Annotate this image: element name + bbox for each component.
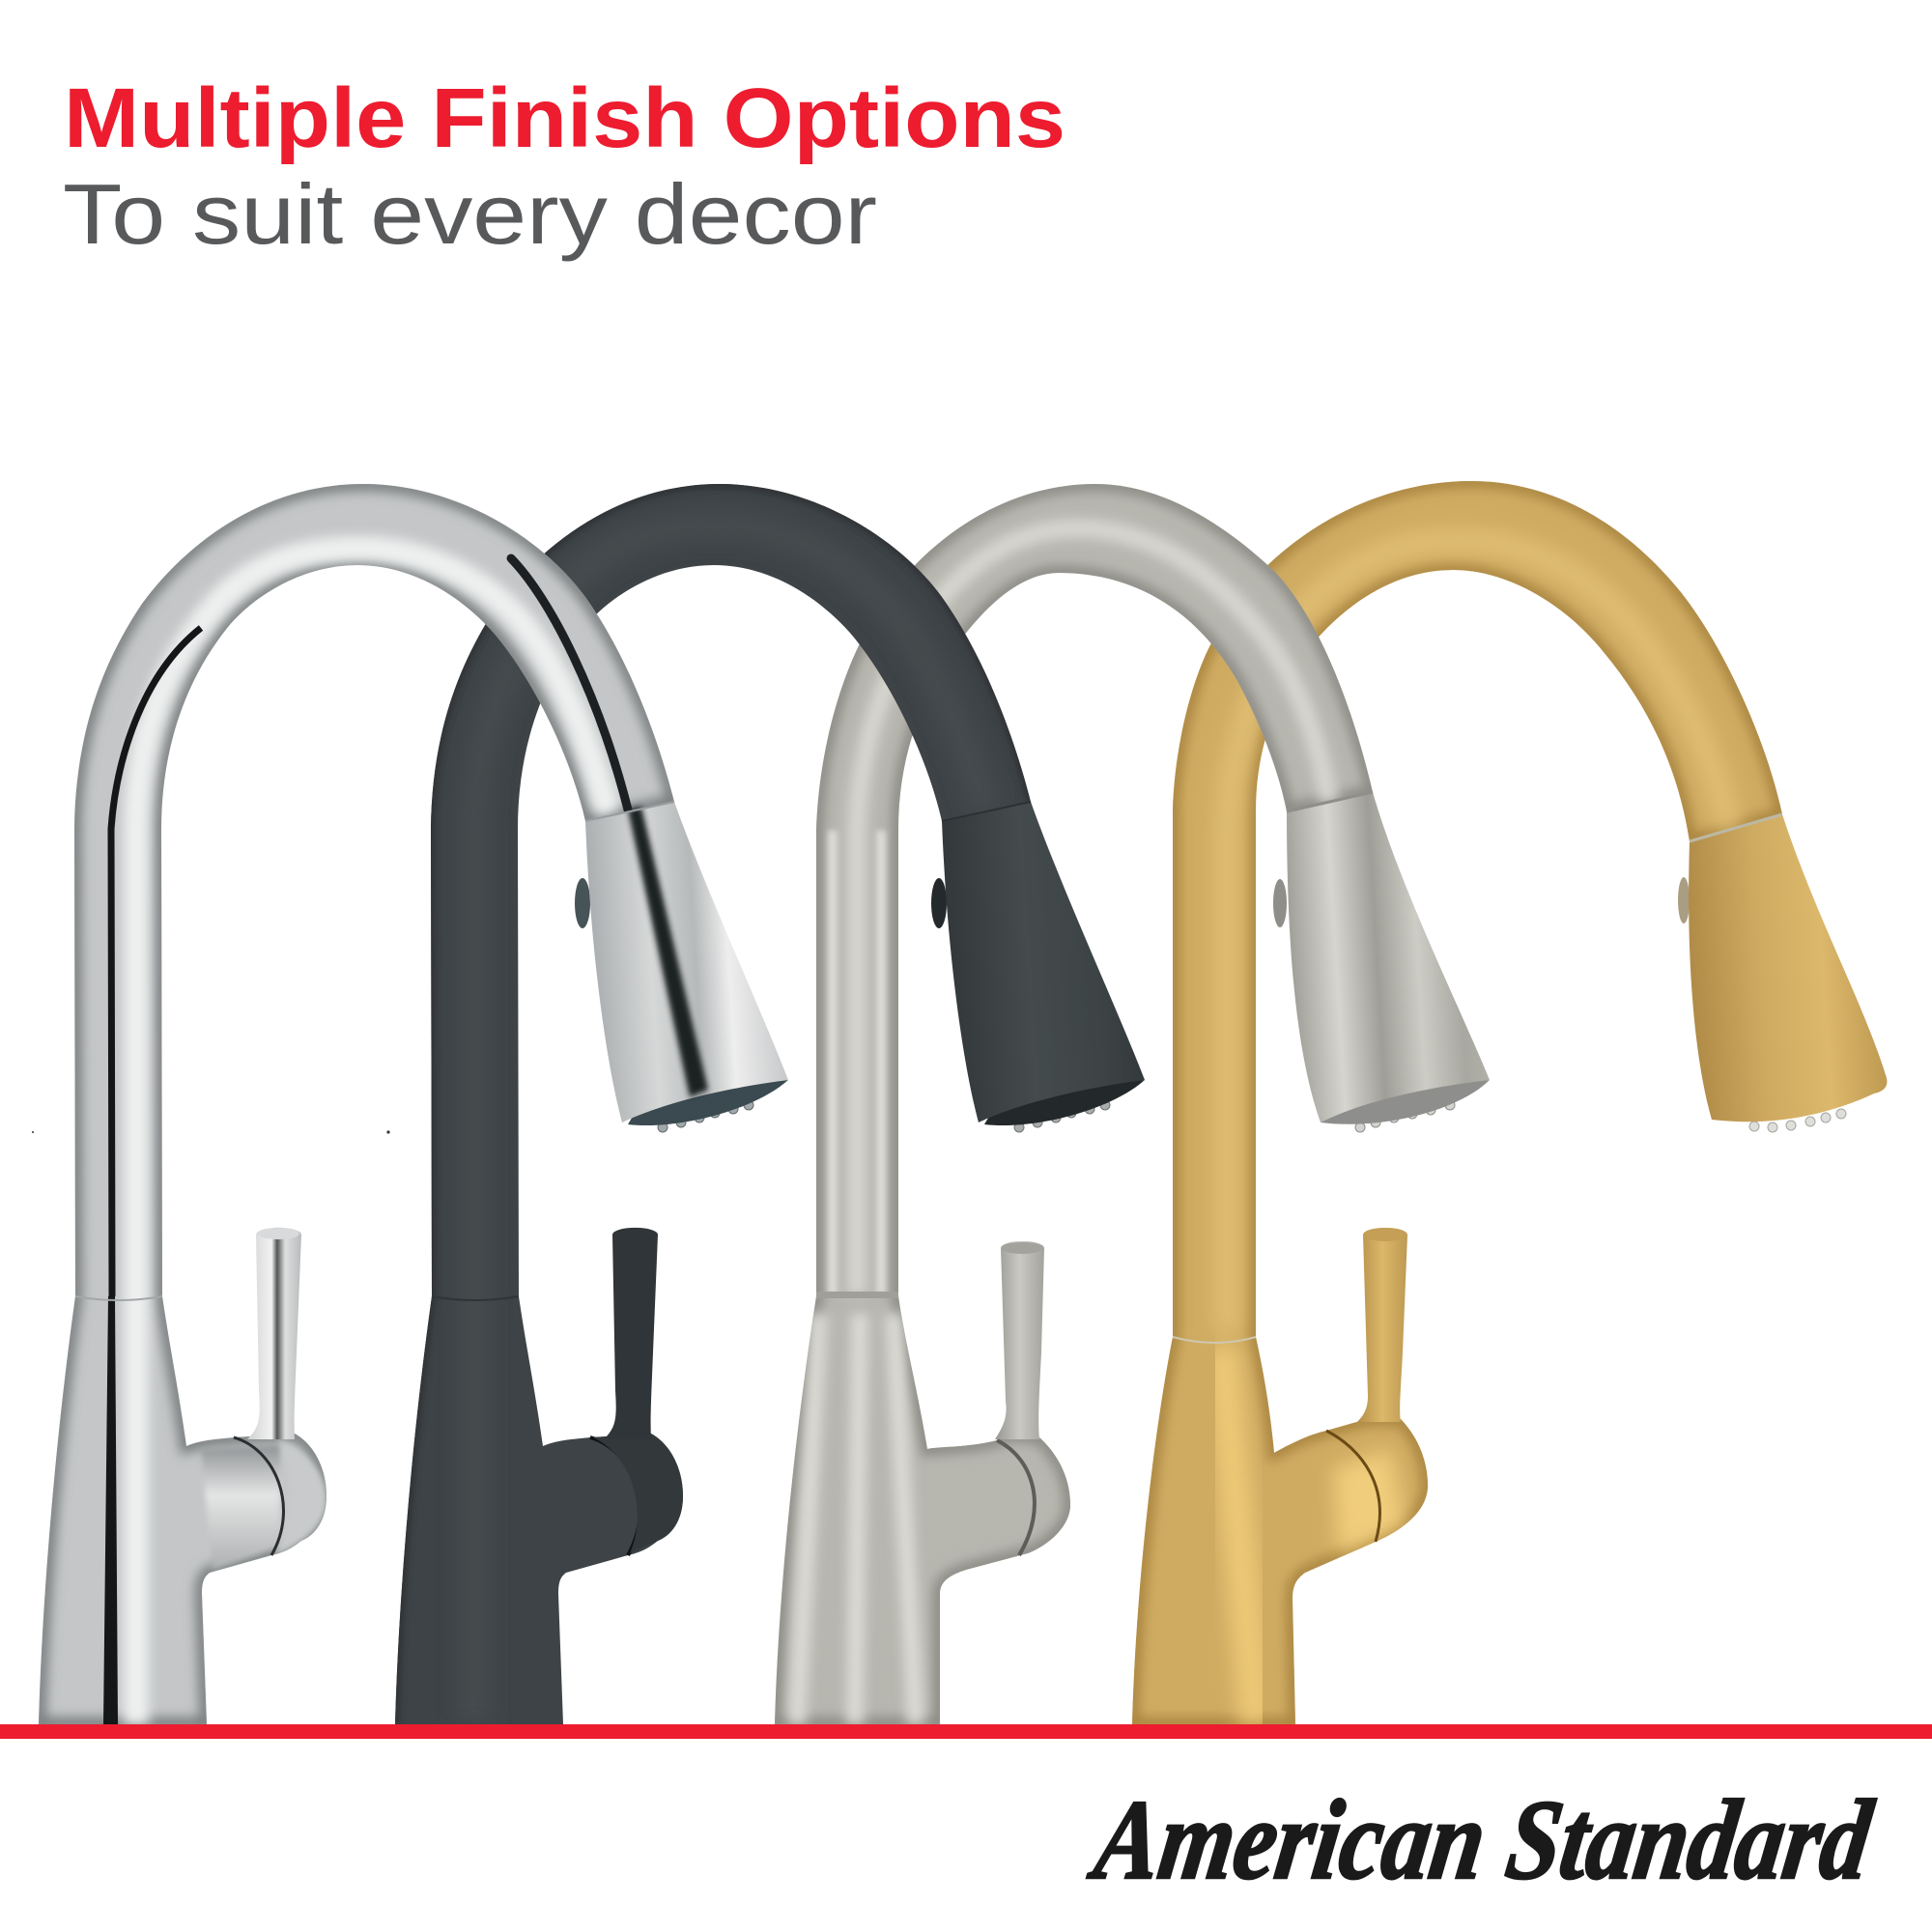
gold collar line [1173, 1337, 1256, 1343]
faucet: brushed nickel [775, 484, 1490, 1724]
black spray head [942, 802, 1145, 1122]
heading: Multiple Finish Options: Multiple Finish Options [64, 71, 1065, 165]
black lever [604, 1228, 658, 1439]
gold head joint [1690, 814, 1782, 841]
black head joint [942, 802, 1031, 821]
chrome dark reflection, neck [511, 558, 628, 810]
black spray button [931, 878, 947, 928]
black spray nozzles [1014, 1100, 1110, 1132]
gold handle ring [1326, 1431, 1379, 1542]
nickel spray button [1273, 879, 1287, 927]
chrome spray nozzles [658, 1100, 753, 1132]
nickel head joint [1287, 792, 1373, 811]
chrome dark reflection, base [103, 1296, 118, 1724]
gold spray nozzles [1749, 1109, 1846, 1132]
red rail [0, 1724, 1932, 1739]
chrome faucet body [39, 484, 674, 1724]
nickel handle ring [997, 1440, 1035, 1555]
black faucet body [395, 484, 1031, 1724]
chrome dark reflection, column [111, 628, 201, 1296]
chrome spray head [585, 802, 788, 1122]
gold spray head [1689, 814, 1887, 1122]
nickel faucet body [775, 484, 1373, 1724]
chrome handle ring [234, 1437, 283, 1555]
chrome head joint [585, 802, 674, 821]
nickel lever [995, 1241, 1044, 1439]
black collar line [432, 1296, 519, 1300]
faucet: matte black [395, 484, 1145, 1724]
chrome head reflection [628, 807, 708, 1097]
faucet: polished chrome [39, 484, 788, 1724]
chrome spray face [628, 1080, 788, 1125]
chrome collar line [75, 1296, 162, 1300]
black handle ring [590, 1437, 639, 1555]
black knob cap [593, 1434, 683, 1553]
black spray face [984, 1080, 1145, 1125]
chrome lever [247, 1228, 301, 1439]
gold lever [1357, 1228, 1407, 1422]
chrome spray button [575, 878, 590, 928]
gold faucet body [1132, 481, 1782, 1724]
nickel spray face [1321, 1080, 1490, 1124]
subheading: To suit every decor: To suit every decor [63, 166, 877, 262]
faucet: brushed gold [1132, 481, 1887, 1724]
nickel spray nozzles [1355, 1100, 1455, 1132]
nickel spray head [1287, 792, 1490, 1122]
small specks [32, 1130, 390, 1134]
gold spray button [1678, 877, 1690, 923]
